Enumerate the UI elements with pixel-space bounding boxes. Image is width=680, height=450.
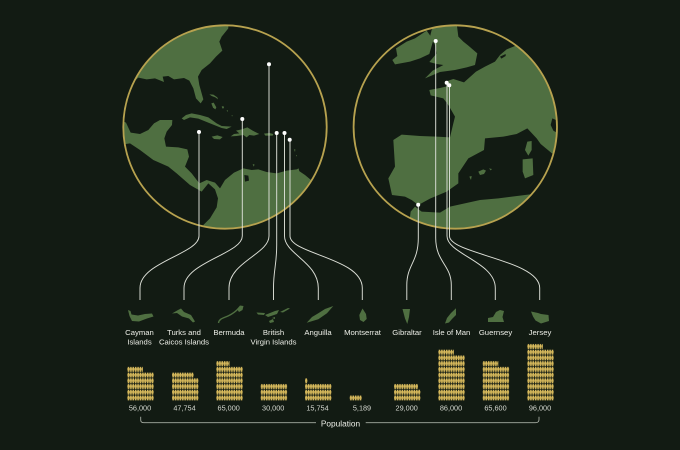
island name labels: Bermuda (213, 328, 245, 337)
population values: 65,000 (218, 404, 240, 412)
island name labels: Montserrat (344, 328, 382, 337)
island name labels: Gibraltar (392, 328, 422, 337)
population values (129, 404, 551, 412)
icon: British Virgin Islands (256, 308, 290, 323)
icon: Guernsey (488, 310, 504, 322)
population values: 47,754 (173, 404, 196, 412)
map: Caribbean (117, 20, 327, 243)
bar: Turks and Caicos Islands (172, 372, 198, 401)
island name labels (125, 328, 551, 346)
bar: Guernsey (483, 361, 509, 401)
ring: Western Europe (354, 25, 557, 229)
icon: Gibraltar (402, 309, 410, 324)
island silhouettes (128, 306, 549, 324)
location dots (197, 39, 451, 207)
population values: 96,000 (529, 404, 551, 412)
population bracket (141, 417, 539, 423)
icon: Jersey (531, 312, 549, 324)
island name labels: Guernsey (479, 328, 512, 337)
island name labels: Turks and (167, 328, 201, 337)
population values: 56,000 (129, 404, 151, 412)
pictogram bars (127, 344, 554, 401)
bar: Bermuda (216, 361, 243, 401)
icon: Anguilla (307, 306, 333, 323)
icon: Cayman Islands (128, 310, 154, 322)
icon: Montserrat (359, 308, 367, 322)
island name labels: Jersey (529, 328, 551, 337)
island name labels: Isle of Man (433, 328, 470, 337)
population values: 65,600 (484, 404, 507, 412)
population values: 5,189 (353, 404, 371, 412)
bar: Montserrat (350, 395, 362, 401)
population values: 86,000 (440, 404, 462, 412)
bar: Anguilla (305, 378, 331, 401)
population values: 15,754 (306, 404, 329, 412)
ring: Caribbean (123, 25, 327, 229)
island name labels: Islands (127, 337, 152, 346)
population label: Population (321, 418, 360, 428)
island name labels: Anguilla (304, 328, 332, 337)
map: Western Europe (352, 24, 558, 230)
bar: Cayman Islands (127, 367, 154, 401)
population values: 29,000 (396, 404, 418, 412)
bar: British Virgin Islands (261, 384, 287, 401)
island name labels: Virgin Islands (250, 337, 297, 346)
icon: Bermuda (218, 306, 244, 323)
bar: Isle of Man (438, 350, 465, 401)
island name labels: British (263, 328, 284, 337)
island name labels: Caicos Islands (159, 337, 209, 346)
bar: Gibraltar (394, 384, 420, 401)
bar: Jersey (527, 344, 554, 401)
icon: Isle of Man (445, 308, 456, 324)
island name labels: Cayman (125, 328, 154, 337)
population values: 30,000 (262, 404, 284, 412)
icon: Turks and Caicos Islands (172, 308, 195, 322)
connector lines (140, 41, 540, 300)
